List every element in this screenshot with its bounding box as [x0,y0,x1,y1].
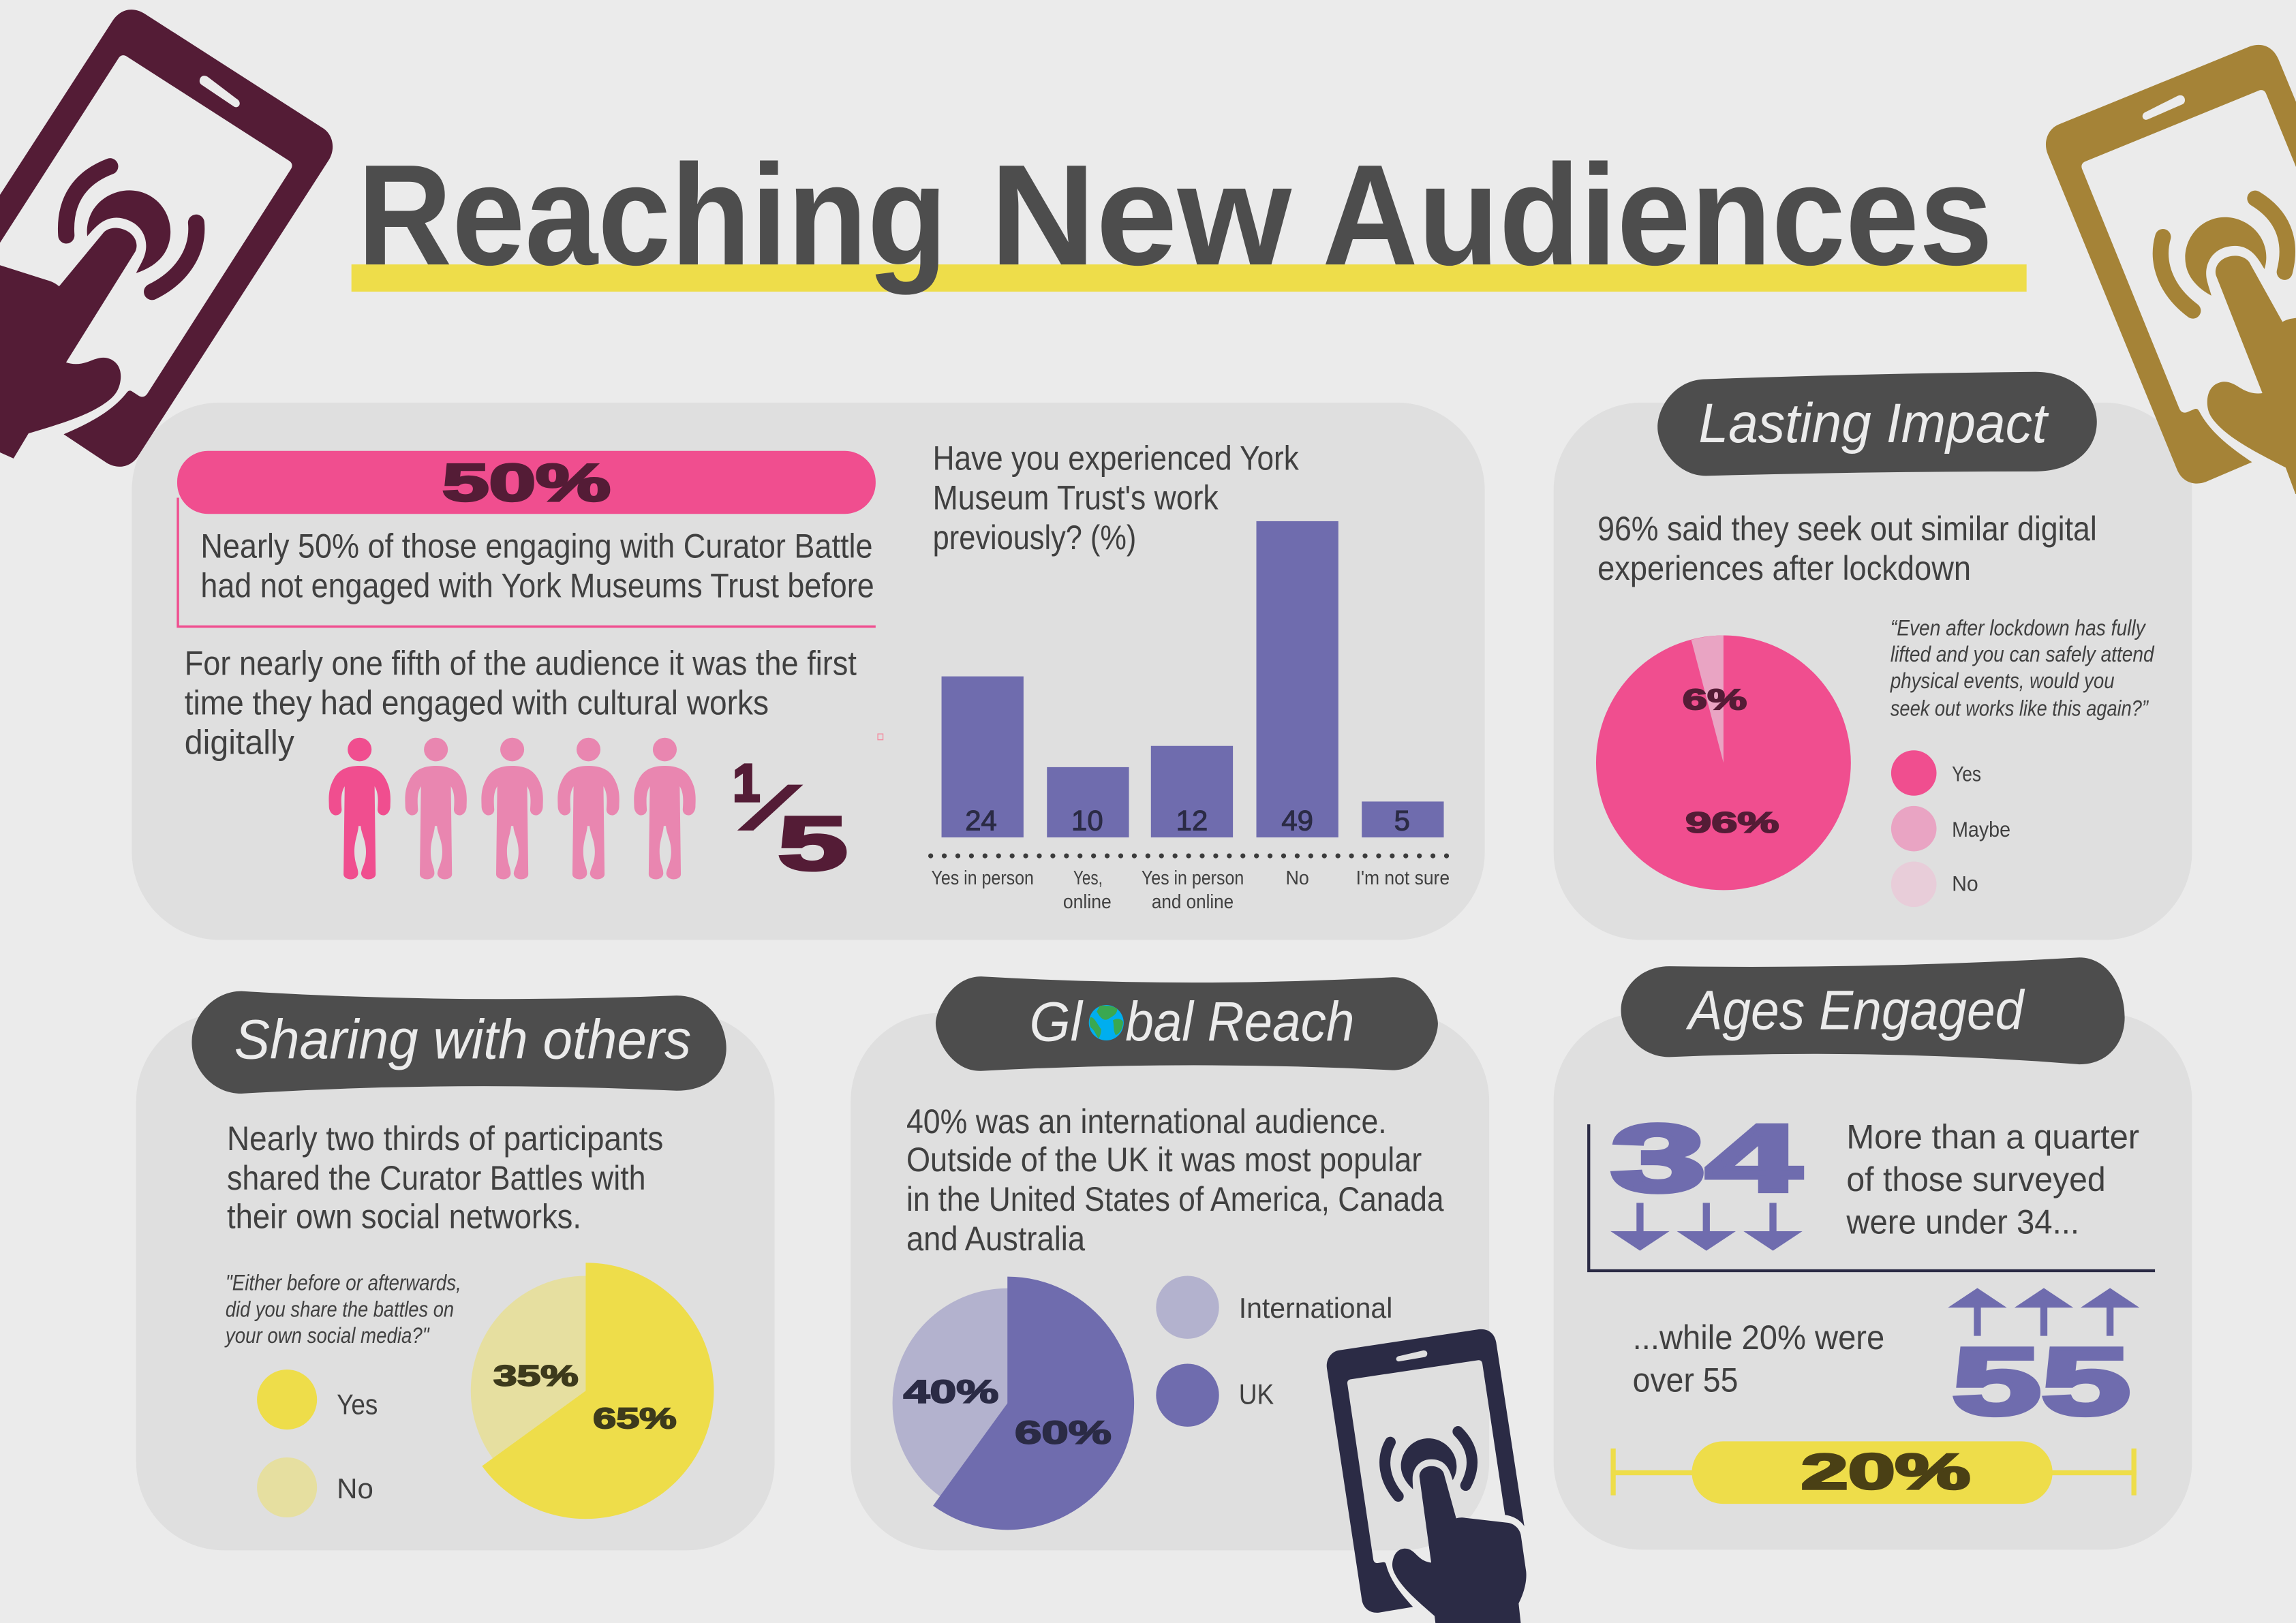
text: two thirds [227,1119,663,1236]
heading: Lasting Impact [1657,372,2097,476]
legend: Yes [337,1389,378,1421]
text: one fifth: digitally [185,723,295,762]
title [352,134,2027,295]
pie chart: seek out again: 6% [1683,683,1747,716]
pie chart: audience: 40% [904,1374,998,1410]
bar chart: 49 [1281,804,1313,836]
text: international audience: and Australia [906,1219,1086,1258]
question: previous experience: Have you experienced York [933,439,1299,478]
text: under 34: of those surveyed [1846,1160,2106,1199]
legend: International [1239,1292,1392,1324]
text: international audience: 40% was an international audience. [906,1102,1387,1141]
bar chart: Yes, [1073,867,1103,889]
question: previous experience: Museum Trust's work [933,478,1219,517]
50% banner: 50% [442,454,611,512]
panel: lasting impact [1554,372,2192,940]
panel: first engagement and chart [132,403,1485,940]
quote: survey question [224,1271,461,1348]
text: over 55 [1633,1318,1884,1399]
20% range bar [1610,1441,2137,1504]
icon: globe [1089,1005,1124,1040]
title: Reaching [357,134,947,295]
heading: Lasting Impact: Lasting Impact [1698,392,2049,454]
bar chart: 5 [1394,804,1410,836]
number: 34: 34 [1610,1105,1801,1211]
heading: Global Reach: bal Reach [1125,991,1354,1053]
bar chart: 24 [965,804,997,836]
arrows: down [1610,1203,1803,1251]
pie chart: shared: 65% [593,1402,677,1435]
fraction: one fifth: 1 [733,754,760,812]
legend [1156,1276,1392,1427]
heading: Global Reach: Gl [1029,991,1084,1053]
text: international audience [906,1102,1444,1258]
pie chart: audience [893,1277,1134,1530]
text: two thirds: shared the Curator Battles with [227,1158,646,1197]
50% banner [177,451,876,627]
bar chart: online [1063,891,1112,913]
quote: survey question: "Either before or afterwards, [226,1271,461,1295]
quote: survey question: did you share the battles on [226,1297,454,1321]
quote: survey question: your own social media?" [224,1323,430,1348]
quote: survey question [1890,616,2155,721]
fraction: one fifth [733,754,848,886]
text: under 34: More than a quarter [1846,1117,2139,1156]
bar chart: and online [1152,891,1234,913]
text: international audience: Outside of the UK it was most popular [906,1140,1422,1179]
panel: sharing with others [136,991,775,1550]
people icons: one in five [328,738,696,880]
text: 96% [1597,509,2097,587]
heading: Ages Engaged [1621,957,2125,1064]
legend [1891,750,2010,907]
arrows: up [1948,1288,2139,1336]
question: previous experience: previously? (%) [933,518,1136,557]
quote: survey question: physical events, would you [1890,668,2115,693]
text: over 55: over 55 [1633,1360,1738,1399]
text: 96%: experiences after lockdown [1597,548,1971,587]
pie chart: seek out again: 96% [1685,807,1779,839]
heading: Ages Engaged: Ages Engaged [1685,979,2025,1041]
icon: gold phone [2034,30,2296,532]
text: two thirds: their own social networks. [227,1197,581,1236]
text: one fifth [185,644,857,762]
title: Audiences [1322,134,1993,295]
legend [257,1370,378,1517]
legend: Maybe [1952,818,2010,841]
legend: No [1952,871,1978,895]
heading: Sharing with others [192,991,726,1094]
bar chart: No [1285,867,1309,889]
text: under 34: were under 34... [1846,1202,2079,1241]
text: 96%: 96% said they seek out similar digital [1597,509,2097,548]
panel: ages engaged [1554,957,2192,1549]
text: under 34 [1846,1117,2139,1241]
legend: No [337,1472,373,1504]
pie chart: seek out again [1596,636,1851,890]
legend: UK [1239,1378,1274,1410]
text: over 55: ...while 20% were [1633,1318,1884,1357]
text: nearly 50% [200,527,874,605]
icon: maroon phone [0,0,353,526]
quote: survey question: “Even after lockdown has fully [1891,616,2146,640]
title: New [990,134,1292,295]
text: two thirds: Nearly two thirds of participants [227,1119,663,1158]
text: nearly 50%: Nearly 50% of those engaging with Curator Battle [200,527,873,566]
bar chart [931,521,1452,913]
bar chart: 10 [1071,804,1103,836]
text: one fifth: For nearly one fifth of the audience it was the first [185,644,857,683]
icon: navy phone [1327,1329,1527,1623]
quote: survey question: lifted and you can safely attend [1891,642,2155,666]
text: one fifth: time they had engaged with cultural works [185,683,769,722]
text: nearly 50%: had not engaged with York Museums Trust before [200,566,874,605]
bar chart: Yes in person [1142,867,1244,889]
bar chart: I'm not sure [1356,867,1450,889]
legend: Yes [1952,762,1981,786]
divider bracket [1589,1124,2155,1271]
bar chart: Yes in person [932,867,1034,889]
number: 55: 55 [1952,1329,2130,1435]
heading: Global Reach [936,976,1438,1071]
quote: survey question: seek out works like this again?” [1891,696,2149,721]
panel: global reach [851,976,1489,1550]
fraction: one fifth: 5 [778,801,848,886]
text: international audience: in the United States of America, Canada [906,1179,1444,1218]
heading: Sharing with others: Sharing with others [234,1008,691,1070]
pie chart: shared: 35% [493,1360,579,1393]
pie chart: audience: 60% [1015,1415,1112,1451]
20% range bar: 20% [1801,1444,1970,1500]
pie chart: shared [471,1263,714,1519]
question: previous experience [933,439,1299,557]
bar chart: 12 [1176,804,1208,836]
